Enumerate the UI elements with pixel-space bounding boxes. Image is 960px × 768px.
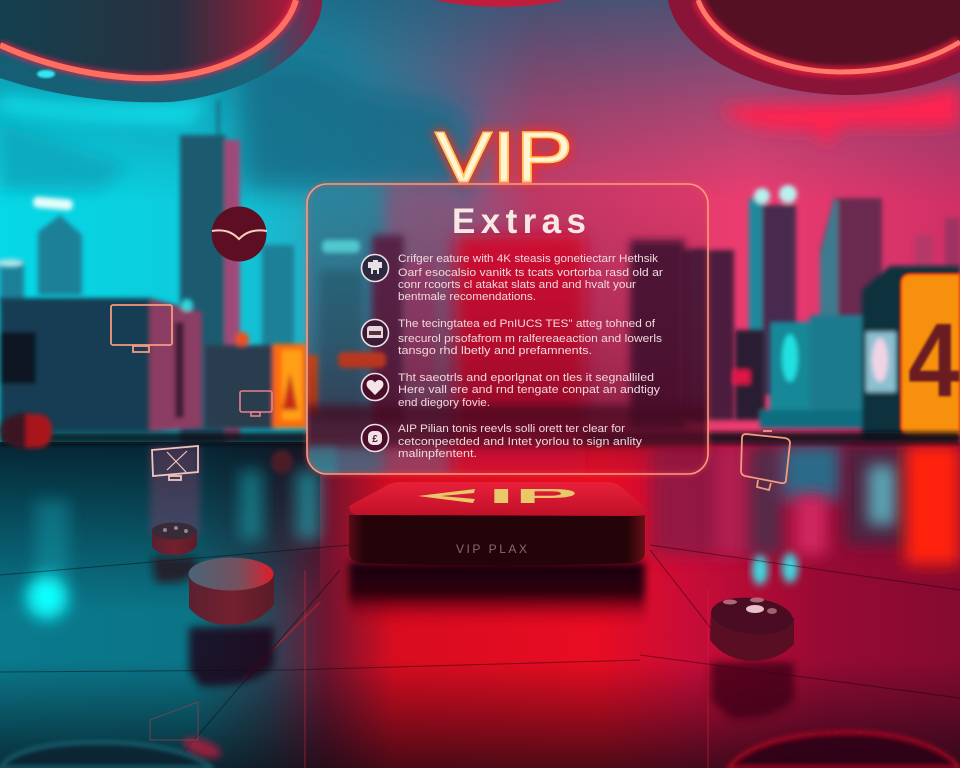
left building block [0,298,307,432]
floating icon: monitor large [111,305,172,352]
device: VIP PLAX box [349,482,645,626]
device top logo [418,486,578,508]
puck small [152,522,197,583]
floor seams [0,545,960,768]
text: feature 4 [398,423,643,460]
icon: feature 1 [362,254,388,282]
icon: feature 3 heart [362,374,388,400]
device top logo: IP [488,486,578,508]
text: feature 2: srecurol prsofafrom m ralfereaeaction and lowerls [398,333,663,345]
text: feature 1: Oarf esocalsio vanitk ts tcats vortorba rasd old ar [398,267,663,279]
text: feature 3: end diegory fovie. [398,397,490,409]
device label: VIP PLAX [456,542,527,556]
text: feature 3 [398,372,661,409]
feature 3: heart [362,372,661,409]
feature 4: plan [362,423,643,460]
text: feature 1: Crifger eature with 4K steasis gonetiectarr Hethsik [398,253,659,265]
text: feature 4: AIP Pilian tonis reevls solli orett ter clear for [398,423,625,435]
capsule left [0,413,52,449]
glass panel [300,180,710,480]
text: feature 1: bentmale recomendations. [398,291,536,303]
floating icon: monitor crossed [152,446,198,480]
icon: feature 2 [362,320,388,346]
left reflections [35,500,69,580]
icon: feature 4 [362,424,388,452]
right reflections [650,445,750,555]
bottom arcs [728,732,960,768]
heading: Extras: Extras [452,202,586,241]
floor [0,432,960,768]
ceiling ring: centre [434,0,566,7]
text: feature 1: conr rcoorts cl atakat slats and and hvalt your [398,279,636,291]
background: neon city sky [0,0,960,460]
right skyline [680,185,960,420]
ceiling ring: left [0,0,322,102]
puck right [709,594,795,719]
VIP neon sign: VIP [435,118,573,198]
VIP neon sign: VIP [435,118,573,198]
ceiling ring: right [668,0,960,95]
text: feature 3: Tht saeotrls and eporlgnat on tles it segnalliled [398,372,654,384]
orange 4 screen [901,274,960,436]
text: feature 2: tansgo rhd lbetly and prefamnents. [398,345,592,357]
text: feature 1 [398,253,663,303]
left skyline [0,100,294,445]
floor back band [0,432,960,444]
floor reflection: monitor ghost [150,702,198,740]
floating icon: monitor small [240,391,272,416]
text: feature 2: The tecingtatea ed PnIUCS TES" atteg tohned of [398,318,656,330]
floating icon: heart orb [212,206,267,262]
text: feature 4: malinpfentent. [398,448,477,460]
feature 1: 4K [362,253,663,303]
icon: feature 4: £ [372,434,378,445]
right machinery [732,266,960,440]
text: feature 3: Here vall ere and rnd tengate conpat an andtigy [398,384,661,396]
feature 2: plan [362,318,663,357]
text: feature 2 [398,318,663,357]
left sky lights [0,196,73,267]
puck large [188,558,274,686]
floating icon: monitor right [741,431,790,490]
text: feature 4: cetconpeetded and Intet yorlou to sign anlity [398,436,643,448]
small puck mid left [271,450,293,474]
device reflection [349,562,645,626]
panel backdrop: blurred city [300,180,710,480]
